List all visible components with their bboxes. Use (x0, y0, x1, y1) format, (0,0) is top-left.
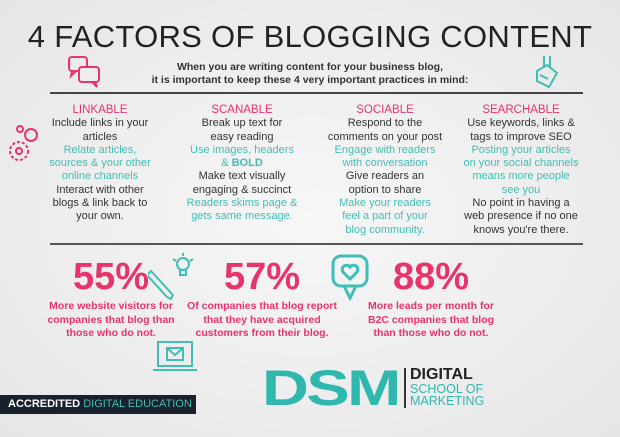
column: searchable (464, 104, 578, 236)
logo: DSM: DIGITAL (410, 366, 473, 383)
column: searchable: knows you're there. (473, 224, 569, 236)
column: linkable: Interact with other (56, 184, 144, 196)
column: scanable (187, 104, 298, 222)
column: sociable: Respond to the (348, 117, 422, 129)
icon: pencil (148, 270, 174, 300)
column: scanable: engaging & succinct (193, 184, 291, 196)
stat: 88%: B2C companies that blog (368, 314, 494, 326)
column: searchable: Posting your articles (471, 144, 571, 156)
subtitle (152, 61, 468, 86)
column: linkable: sources & your other (49, 157, 151, 169)
icon: hand (536, 56, 558, 88)
column: searchable: see you (502, 184, 540, 196)
column: searchable: SEARCHABLE (482, 104, 560, 116)
column: searchable: on your social channels (464, 157, 578, 169)
column: linkable: Relate articles, (64, 144, 136, 156)
column: sociable: with conversation (342, 157, 428, 169)
stat: 57% (187, 256, 337, 339)
banner: accredited (0, 395, 196, 414)
column: scanable: Readers skims page & (187, 197, 297, 209)
column: sociable: Make your readers (339, 197, 431, 209)
stat: 55% (47, 256, 175, 339)
logo: DSM: DSM (262, 360, 399, 416)
column: searchable: Use keywords, links & (467, 117, 575, 129)
column: sociable: Give readers an (346, 170, 424, 182)
stat: 55%: those who do not. (66, 327, 156, 339)
column: sociable: feel a part of your (342, 210, 428, 222)
column: scanable: gets same message. (191, 210, 293, 222)
stat: 55%: 55% (73, 256, 149, 298)
column: sociable: option to share (349, 184, 421, 196)
subtitle: it is important to keep these 4 very important practices in mind: (152, 74, 468, 86)
column: linkable (49, 104, 151, 222)
icon: speech bubbles (68, 56, 100, 88)
column: searchable: tags to improve SEO (470, 131, 572, 143)
stat: 55%: More website visitors for (49, 300, 173, 312)
stat: 57%: 57% (224, 256, 300, 298)
icon: laptop mail (153, 341, 197, 371)
column: linkable: your own. (76, 210, 124, 222)
column: linkable: articles (83, 131, 117, 143)
stat: 88% (368, 256, 494, 339)
stat: 57%: Of companies that blog report (187, 300, 337, 312)
column: searchable: web presence if no one (464, 210, 578, 222)
column: scanable: Break up text for (202, 117, 282, 129)
column: sociable: Engage with readers (335, 144, 435, 156)
column: linkable: blogs & link back to (53, 197, 147, 209)
banner: accredited: ACCREDITED DIGITAL EDUCATION (8, 398, 192, 410)
column: scanable: easy reading (210, 131, 274, 143)
column: scanable: Use images, headers (190, 144, 294, 156)
column: scanable: SCANABLE (211, 104, 273, 116)
logo: DSM (262, 360, 484, 416)
column: linkable: LINKABLE (72, 104, 127, 116)
logo: DSM: SCHOOL OF (410, 382, 483, 396)
title: 4 FACTORS OF BLOGGING CONTENT (28, 19, 592, 54)
column: linkable: online channels (62, 170, 138, 182)
column: sociable (328, 104, 442, 236)
logo: DSM: MARKETING (410, 394, 484, 408)
stat: 88%: More leads per month for (368, 300, 494, 312)
column: searchable: means more people (472, 170, 570, 182)
subtitle: When you are writing content for your business blog, (177, 61, 443, 73)
stat: 57%: customers from their blog. (195, 327, 329, 339)
stat: 88%: than those who do not. (374, 327, 488, 339)
column: sociable: comments on your post (328, 131, 442, 143)
stat: 57%: that they have acquired (203, 314, 321, 326)
column: searchable: No point in having a (472, 197, 570, 209)
column: sociable: SOCIABLE (356, 104, 414, 116)
icon: heart bubble (332, 254, 368, 302)
icon: bulb (172, 253, 194, 276)
icon: gears (9, 125, 38, 161)
column: sociable: blog community. (345, 224, 425, 236)
column: scanable: & BOLD (221, 157, 263, 169)
column: scanable: Make text visually (199, 170, 285, 182)
stat: 88%: 88% (393, 256, 469, 298)
column: linkable: Include links in your (52, 117, 148, 129)
stat: 55%: companies that blog than (47, 314, 175, 326)
